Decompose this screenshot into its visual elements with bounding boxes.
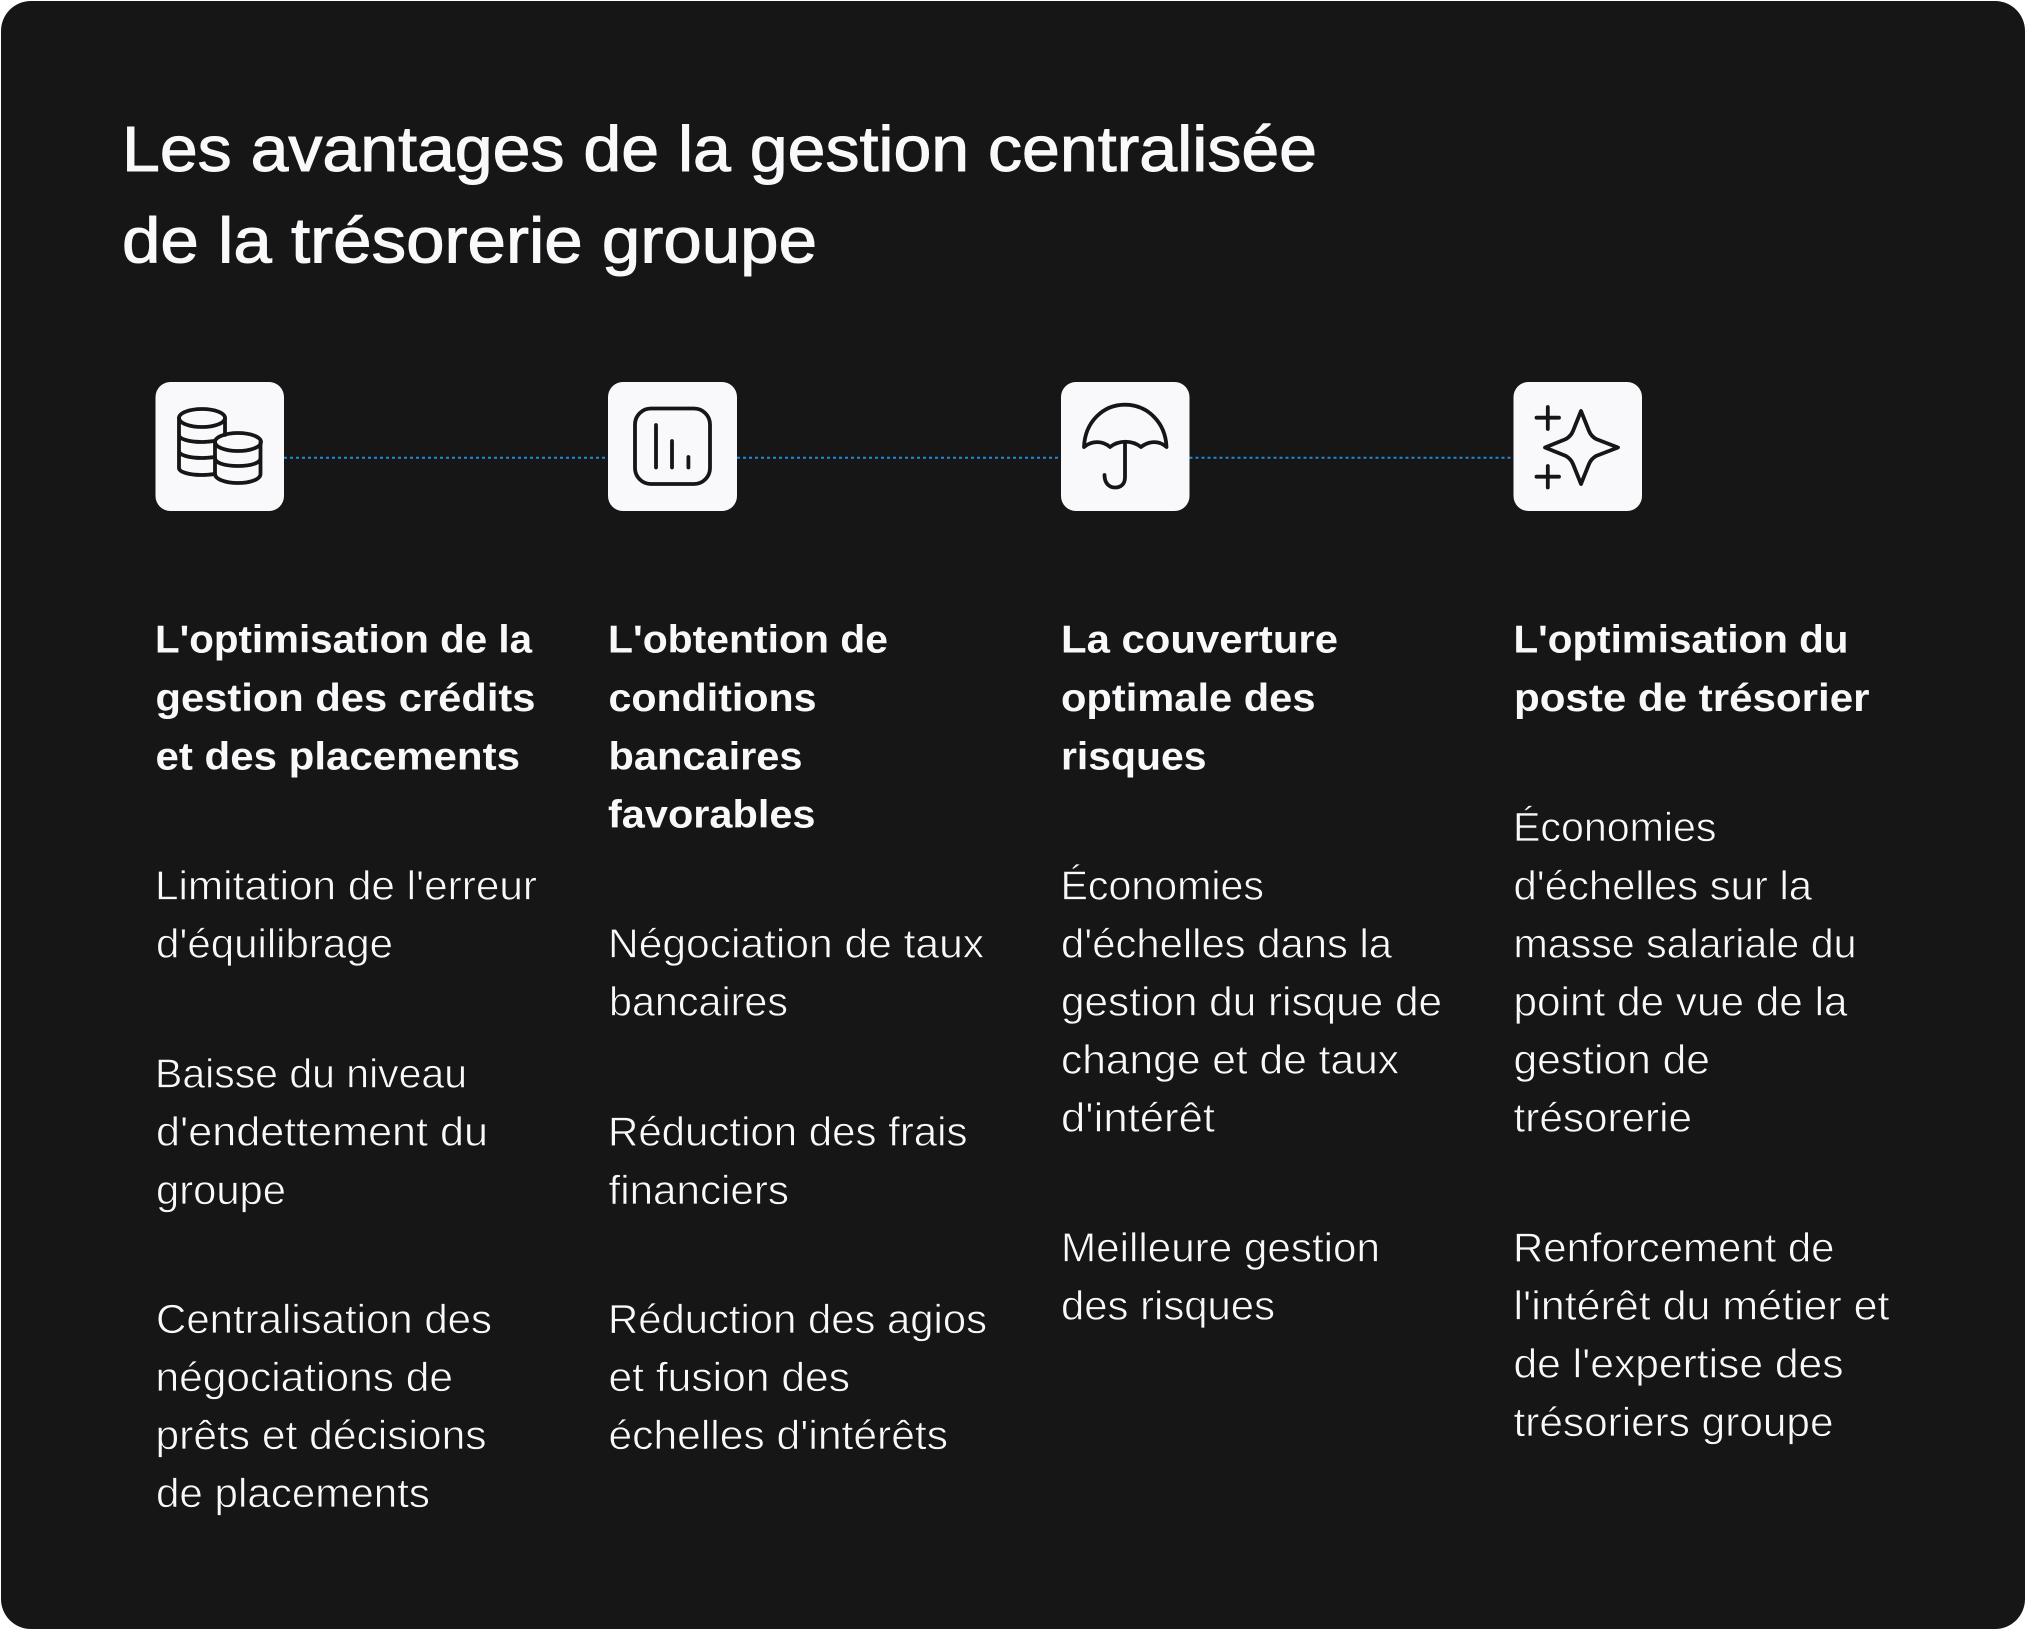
text: réduction des frais: Réduction des frais <box>608 1109 968 1155</box>
icon: sparkle star <box>1514 382 1642 511</box>
text: limitation: d'équilibrage <box>156 920 393 966</box>
text: renforcement: l'intérêt du métier et <box>1514 1283 1890 1329</box>
text: renforcement: trésoriers groupe <box>1514 1399 1834 1445</box>
icon: umbrella <box>1061 382 1190 511</box>
text: baisse: d'endettement du <box>156 1109 488 1155</box>
text: négociation <box>608 920 985 1024</box>
text: limitation: Limitation de l'erreur <box>155 862 537 908</box>
text: baisse: groupe <box>156 1167 286 1213</box>
heading: column 1: et des placements <box>156 735 520 778</box>
text: économies d'échelles: Économies <box>1060 862 1264 908</box>
text: baisse <box>155 1051 488 1213</box>
text: centralisation: Centralisation des <box>156 1296 492 1342</box>
heading: column 3: La couverture <box>1061 619 1338 662</box>
text: économies d'échelles: change et de taux <box>1061 1037 1400 1083</box>
text: économies d'échelles: d'intérêt <box>1061 1095 1216 1141</box>
text: réduction des agios: Réduction des agios <box>608 1296 987 1342</box>
connector line 3 <box>1190 457 1514 459</box>
title <box>122 113 1317 277</box>
text: économies sur la masse salariale: Économies <box>1513 804 1716 850</box>
text: réduction des agios <box>608 1296 987 1458</box>
heading: column 3: optimale des <box>1061 677 1316 720</box>
heading: column 2: L'obtention de <box>608 619 888 662</box>
text: centralisation <box>156 1296 492 1516</box>
text: centralisation: prêts et décisions <box>156 1412 486 1458</box>
text: économies sur la masse salariale: masse salariale du <box>1514 920 1856 966</box>
title: Les avantages de la gestion centralisée <box>122 113 1317 185</box>
text: centralisation: négociations de <box>156 1354 453 1400</box>
heading: column 2: conditions <box>608 677 816 720</box>
heading: column 4 <box>1514 619 1870 720</box>
text: négociation: Négociation de taux <box>608 920 985 966</box>
heading: column 3 <box>1061 619 1338 778</box>
panel: column 4, poste de trésorier <box>1513 382 1890 1445</box>
text: baisse: Baisse du niveau <box>155 1051 467 1097</box>
text: économies d'échelles <box>1060 862 1442 1141</box>
icon: coin stacks <box>156 382 284 511</box>
text: économies d'échelles: d'échelles dans la <box>1061 920 1392 966</box>
text: réduction des frais <box>608 1109 968 1213</box>
text: meilleure gestion <box>1061 1224 1380 1329</box>
panel: column 3, couverture des risques <box>1060 382 1442 1329</box>
panel: column 2, conditions bancaires <box>608 382 987 1458</box>
text: renforcement <box>1513 1224 1890 1445</box>
connector line 2 <box>737 457 1061 459</box>
text: réduction des agios: et fusion des <box>608 1354 850 1400</box>
heading: column 1: gestion des crédits <box>156 677 536 720</box>
text: centralisation: de placements <box>156 1470 430 1516</box>
panel: column 1, crédits et placements <box>155 382 537 1516</box>
text: renforcement: de l'expertise des <box>1514 1341 1844 1387</box>
text: réduction des agios: échelles d'intérêts <box>608 1412 948 1458</box>
text: économies sur la masse salariale: point de vue de la <box>1514 978 1848 1024</box>
heading: column 1: L'optimisation de la <box>155 619 532 662</box>
heading: column 2: favorables <box>608 794 816 837</box>
text: économies sur la masse salariale <box>1513 804 1856 1141</box>
text: meilleure gestion: Meilleure gestion <box>1061 1224 1380 1270</box>
heading: column 4: L'optimisation du <box>1514 619 1848 662</box>
text: réduction des frais: financiers <box>608 1167 789 1213</box>
title: de la trésorerie groupe <box>122 205 817 277</box>
text: économies d'échelles: gestion du risque de <box>1061 978 1442 1024</box>
text: renforcement: Renforcement de <box>1513 1224 1834 1270</box>
connector line 1 <box>284 457 608 459</box>
text: économies sur la masse salariale: gestion de <box>1514 1037 1710 1083</box>
heading: column 1 <box>155 619 536 778</box>
heading: column 2 <box>608 619 888 837</box>
text: négociation: bancaires <box>609 978 788 1024</box>
icon: bar chart square <box>608 382 737 511</box>
text: économies sur la masse salariale: trésorerie <box>1514 1095 1692 1141</box>
text: économies sur la masse salariale: d'échelles sur la <box>1514 862 1812 908</box>
heading: column 4: poste de trésorier <box>1514 677 1870 720</box>
heading: column 2: bancaires <box>608 735 802 778</box>
text: limitation <box>155 862 537 966</box>
heading: column 3: risques <box>1061 735 1206 778</box>
text: meilleure gestion: des risques <box>1061 1283 1275 1329</box>
